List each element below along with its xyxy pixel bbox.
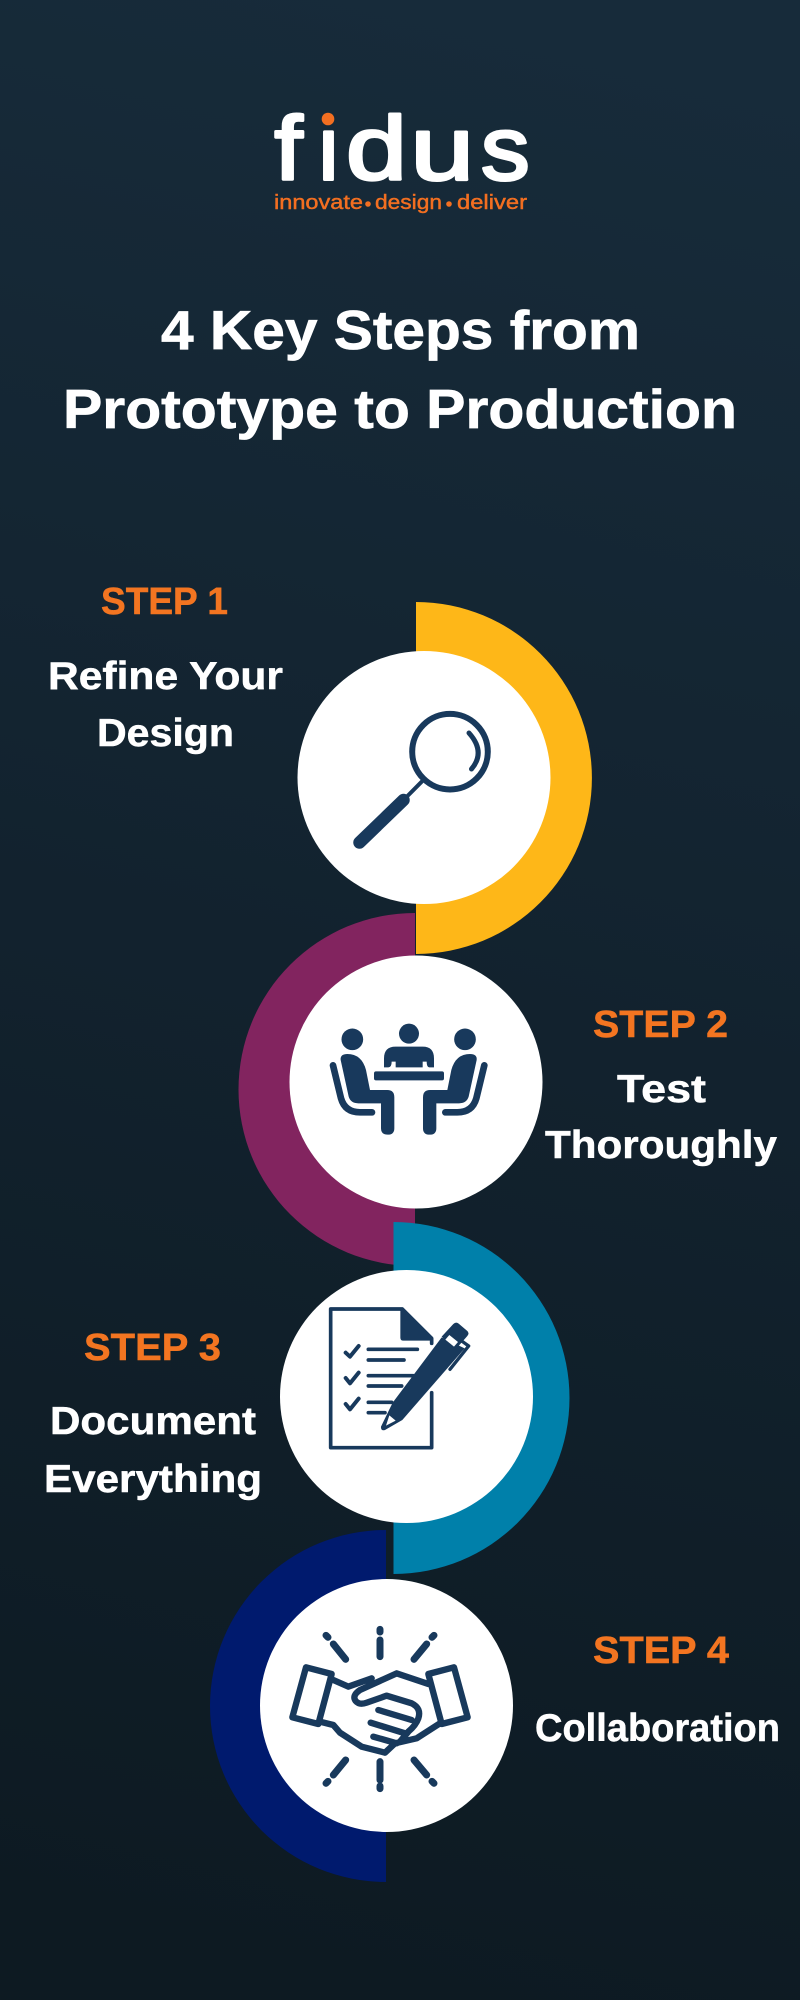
title	[63, 299, 737, 440]
step 2 text: Test	[617, 1068, 706, 1111]
icon: meeting at table	[333, 1024, 484, 1135]
left person	[333, 1028, 394, 1135]
checklist lines	[368, 1349, 417, 1413]
title: 4 Key Steps from	[161, 299, 640, 361]
logo wordmark: u	[410, 100, 474, 200]
pen clip	[450, 1342, 469, 1369]
logo: fidus	[274, 112, 528, 214]
logo orange dot	[322, 113, 334, 125]
logo tagline: deliver	[457, 192, 527, 214]
step 3 text	[44, 1327, 262, 1501]
left cuff	[292, 1667, 332, 1724]
clasped hands	[320, 1673, 440, 1753]
logo wordmark: i	[318, 100, 338, 200]
step 2 text: Thoroughly	[545, 1124, 777, 1167]
step 2 text	[545, 1004, 777, 1167]
logo wordmark: s	[481, 100, 530, 200]
right person	[423, 1028, 484, 1135]
icon: checklist and pen	[331, 1309, 469, 1448]
logo wordmark: d	[346, 100, 407, 200]
step 4 icon circle	[260, 1579, 513, 1832]
step 2 text: STEP 2	[593, 1004, 728, 1046]
half ring: step 1 yellow	[416, 602, 592, 954]
step 3 text: STEP 3	[84, 1327, 221, 1369]
pen band	[445, 1335, 458, 1347]
pen body	[381, 1337, 465, 1430]
step 4 text: Collaboration	[535, 1707, 780, 1750]
step 4 text	[535, 1630, 780, 1750]
step 3 icon circle	[280, 1270, 533, 1523]
step 1 text: Refine Your	[48, 655, 283, 698]
half ring: step 3 teal	[394, 1222, 570, 1574]
step 2 icon circle	[290, 956, 542, 1208]
right cuff	[428, 1667, 468, 1724]
page outline	[331, 1309, 432, 1448]
step 1 icon circle	[298, 651, 550, 904]
half ring: step 2 purple	[238, 913, 415, 1266]
icon: handshake	[292, 1629, 468, 1789]
step 1 text: STEP 1	[101, 581, 228, 623]
step 4 text: STEP 4	[593, 1630, 729, 1672]
step 1 text	[48, 581, 283, 755]
step 3 text: Document	[50, 1400, 256, 1443]
logo wordmark: f	[274, 100, 304, 200]
folded corner	[400, 1309, 433, 1341]
logo wordmark	[274, 112, 528, 182]
centre person	[384, 1024, 434, 1067]
pen tip	[386, 1415, 396, 1426]
icon: magnifying glass	[360, 714, 488, 842]
pen cap	[442, 1323, 468, 1350]
checklist ticks	[346, 1346, 359, 1409]
logo tagline	[274, 192, 527, 214]
title: Prototype to Production	[63, 378, 737, 440]
half ring: step 4 navy	[210, 1530, 386, 1882]
step 1 text: Design	[97, 712, 234, 755]
radiating rays	[326, 1629, 434, 1789]
logo tagline: innovate	[274, 192, 363, 214]
step 3 text: Everything	[44, 1458, 262, 1501]
table	[374, 1071, 444, 1080]
logo tagline: design	[375, 192, 442, 214]
